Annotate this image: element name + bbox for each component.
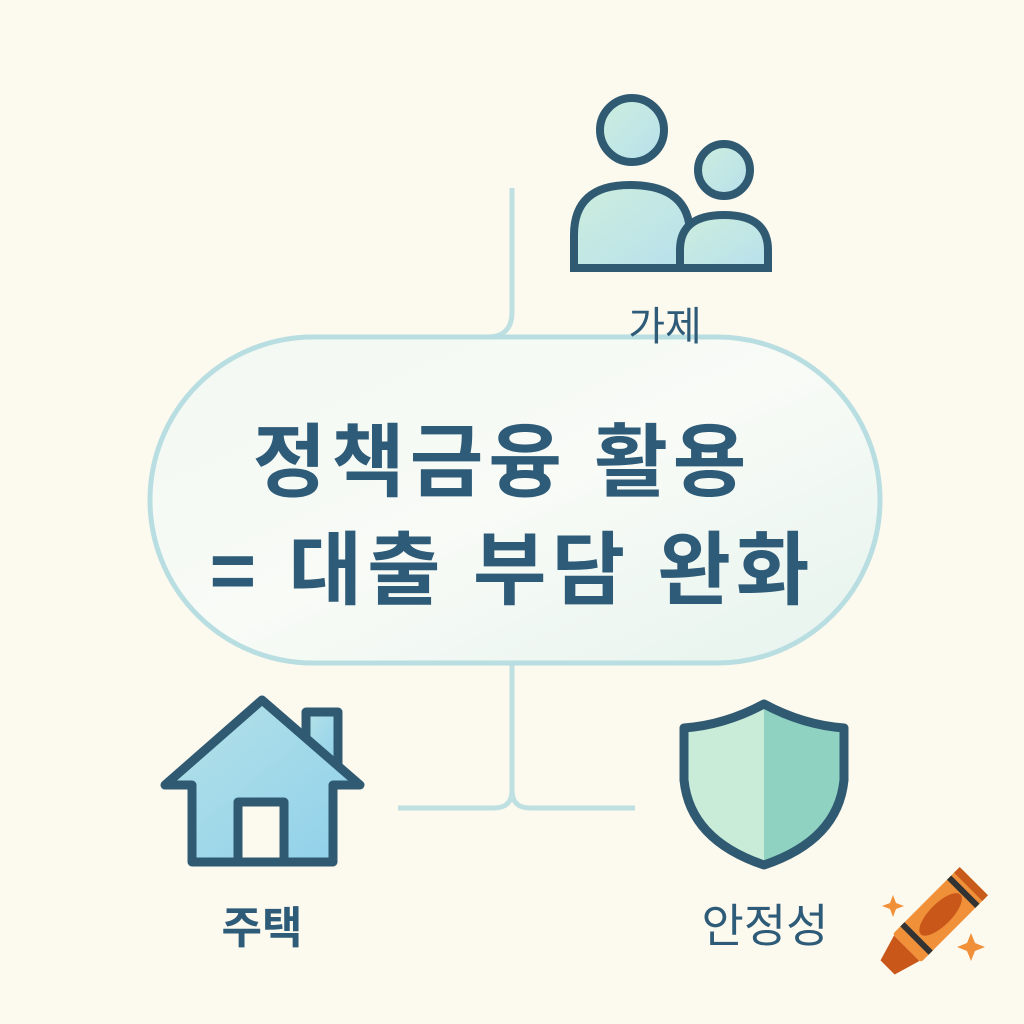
pill text: 정책금융 활용 [253, 418, 751, 507]
main pill [150, 337, 880, 663]
connector: top line [420, 188, 512, 337]
icon: house [165, 700, 360, 862]
icon: family [574, 98, 768, 268]
icon: crayon [873, 867, 988, 982]
sparkles [882, 895, 985, 961]
connector: bottom branches [398, 665, 635, 808]
pill text line 2: = 대출 부담 완화 [210, 526, 814, 615]
label: 가제: 가제 [628, 305, 702, 349]
icon: shield [684, 704, 844, 865]
label: 안정성: 안정성 [702, 900, 828, 952]
label: 주택: 주택 [222, 904, 302, 953]
